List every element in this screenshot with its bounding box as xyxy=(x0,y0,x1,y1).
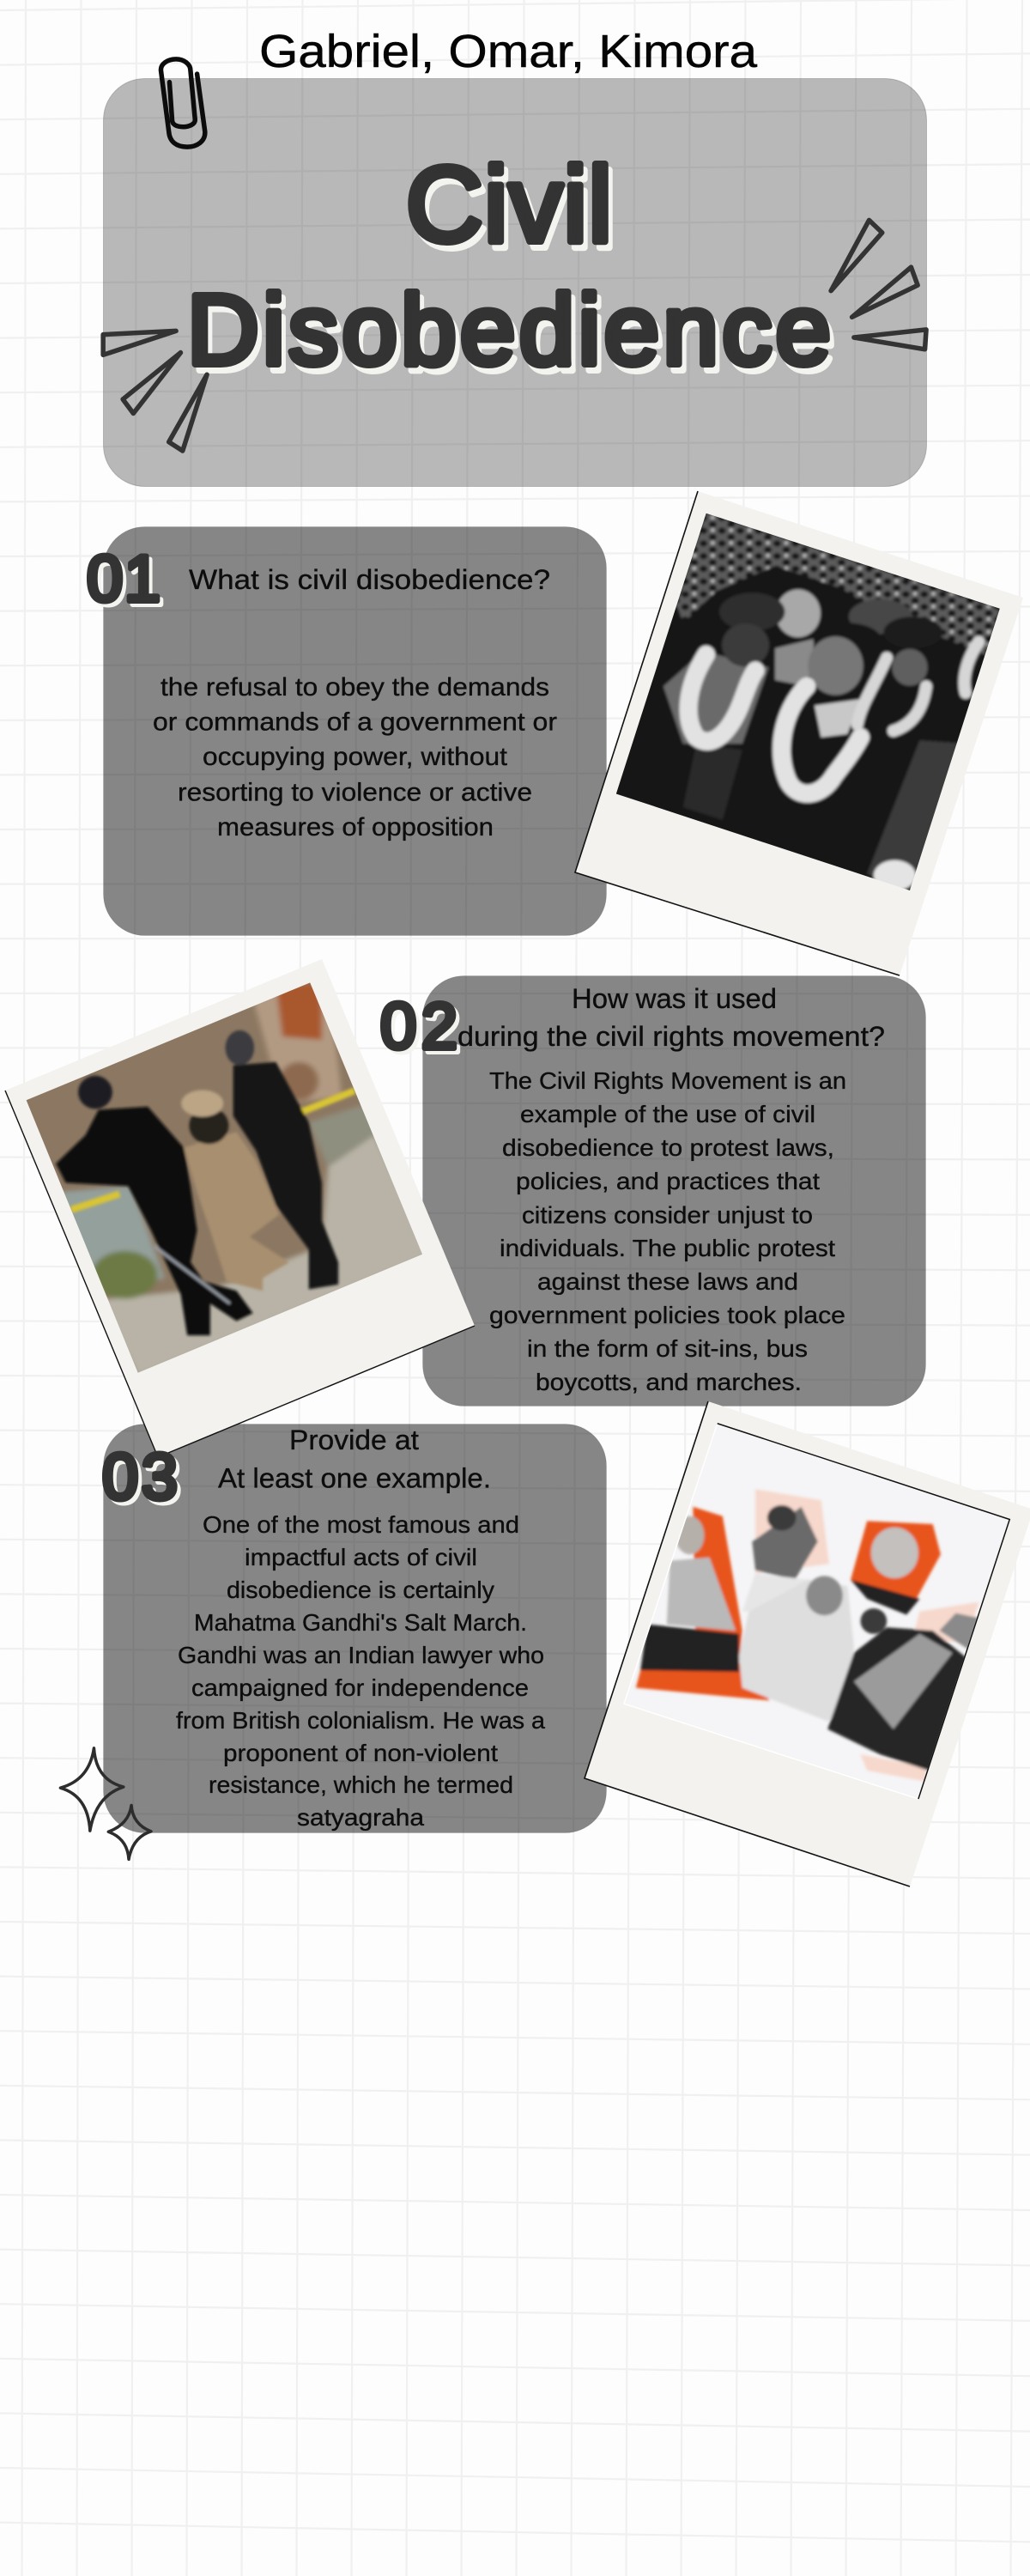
text block: civil rights movement: government policies took place xyxy=(489,1302,845,1328)
text block: Gandhi example: campaigned for independence xyxy=(191,1674,529,1701)
text block: definition xyxy=(153,673,557,841)
heading: question two: during the civil rights movement? xyxy=(457,1021,885,1052)
text block: civil rights movement: The Civil Rights Movement is an xyxy=(489,1067,846,1094)
text block: civil rights movement: example of the use of civil xyxy=(520,1101,815,1127)
text block: civil rights movement: in the form of sit-ins, bus xyxy=(527,1335,808,1362)
text block: Gandhi example: impactful acts of civil xyxy=(245,1544,477,1571)
text block: Gandhi example: resistance, which he termed xyxy=(209,1771,513,1798)
heading: question two xyxy=(457,983,885,1052)
title: Civil Disobedience xyxy=(187,146,831,386)
title: Civil Disobedience: Civil xyxy=(406,146,612,264)
icon: paperclip xyxy=(161,59,205,147)
photo: Gandhi collage xyxy=(585,1401,1030,1886)
text block: definition: measures of opposition xyxy=(217,813,494,841)
text block: Gandhi example: Gandhi was an Indian lawyer who xyxy=(178,1642,544,1668)
heading: question three xyxy=(218,1425,491,1494)
panel: title xyxy=(103,79,927,486)
text block: civil rights movement: individuals. The public protest xyxy=(500,1235,835,1261)
text block: definition: resorting to violence or active xyxy=(178,778,532,807)
text block: civil rights movement: boycotts, and marches. xyxy=(536,1369,802,1395)
panel: what is civil disobedience xyxy=(103,527,606,936)
heading: question two: How was it used xyxy=(572,983,777,1014)
icon: sparkles xyxy=(60,1748,151,1859)
text block: civil rights movement: citizens consider unjust to xyxy=(522,1202,813,1228)
text block: definition: occupying power, without xyxy=(203,743,508,771)
panel: how it was used xyxy=(422,975,925,1406)
text block: civil rights movement: policies, and practices that xyxy=(516,1168,820,1194)
number 02: 02 xyxy=(380,990,457,1063)
text block: definition: the refusal to obey the demands xyxy=(161,673,549,702)
text block: civil rights movement: against these laws and xyxy=(537,1268,798,1295)
text block: Gandhi example: from British colonialism. He was a xyxy=(176,1707,545,1734)
text block: Gandhi example: satyagraha xyxy=(297,1804,424,1831)
text block: Gandhi example: disobedience is certainly xyxy=(227,1577,494,1603)
photo: marchers wearing leis xyxy=(575,491,1023,975)
icon: burst lines right xyxy=(831,220,926,349)
text block: Gandhi example: proponent of non-violent xyxy=(223,1740,498,1766)
text block: Gandhi example: Mahatma Gandhi's Salt March. xyxy=(194,1609,527,1636)
icon: burst lines left xyxy=(103,331,207,451)
heading: author names: Gabriel, Omar, Kimora xyxy=(259,26,758,77)
panel: example xyxy=(103,1424,606,1832)
text block: definition: or commands of a government or xyxy=(153,708,557,737)
heading: question three: At least one example. xyxy=(218,1463,491,1494)
heading: question one: What is civil disobedience? xyxy=(189,564,550,595)
text block: Gandhi example: One of the most famous and xyxy=(203,1511,519,1538)
photo: police escorting protester xyxy=(0,959,475,1457)
number 01: 01 xyxy=(87,543,161,616)
title: Civil Disobedience: Disobedience xyxy=(187,274,831,386)
number 03: 03 xyxy=(102,1441,178,1514)
text block: civil rights movement: disobedience to protest laws, xyxy=(502,1134,834,1161)
text block: civil rights movement xyxy=(489,1067,846,1395)
text block: Gandhi example xyxy=(176,1511,545,1831)
heading: question three: Provide at xyxy=(289,1425,419,1455)
